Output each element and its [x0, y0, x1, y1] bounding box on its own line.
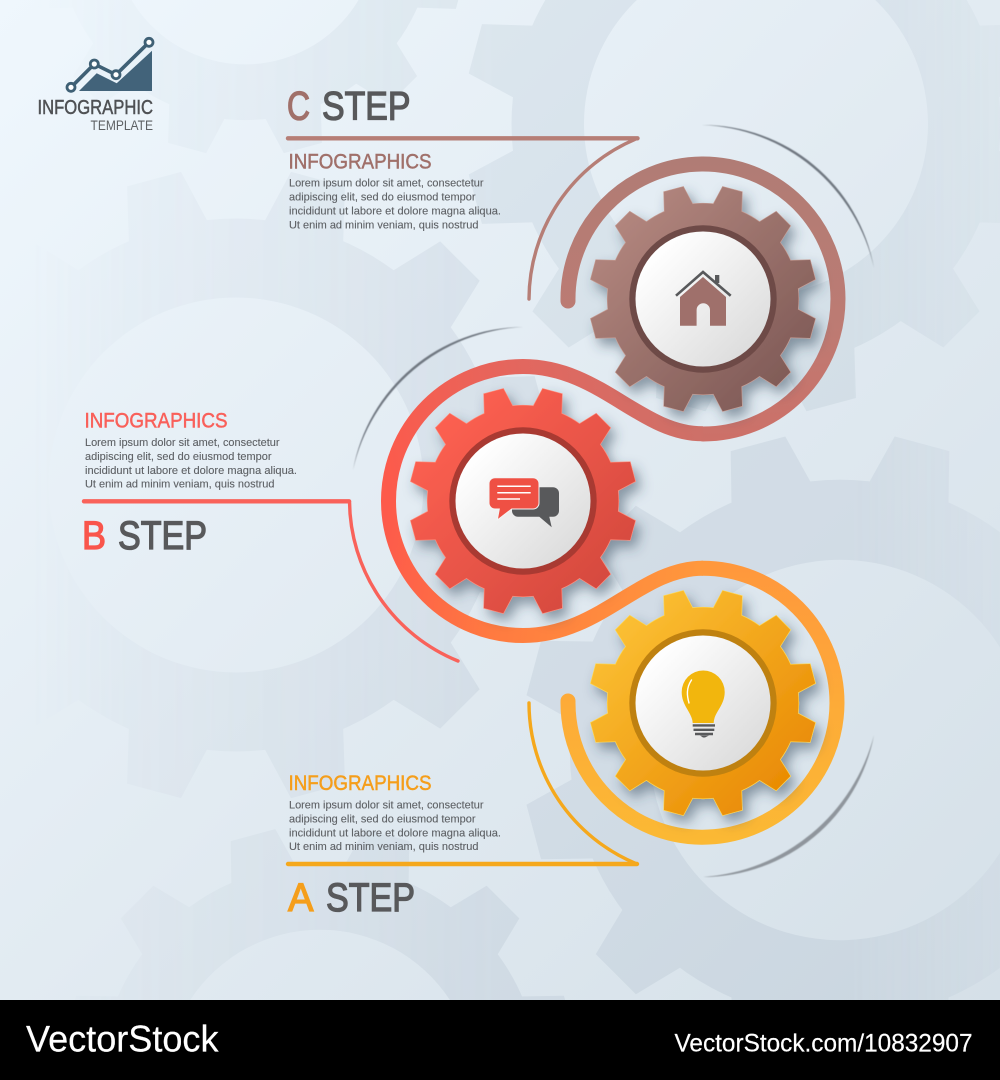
- heading word: STEP: STEP: [118, 514, 207, 558]
- gear C: [583, 179, 823, 419]
- body text: Lorem ipsum dolor sit amet, consectetur: [289, 799, 484, 811]
- body text: [289, 178, 501, 231]
- body text: Lorem ipsum dolor sit amet, consectetur: [289, 178, 484, 190]
- heading letter: A: A: [288, 876, 314, 920]
- grey crescent: A gear: [703, 735, 874, 877]
- body text: [85, 437, 297, 490]
- body text: Ut enim ad minim veniam, quis nostrud: [289, 841, 478, 853]
- body text: incididunt ut labore et dolore magna aliqua.: [289, 206, 501, 218]
- icon: light bulb: [682, 670, 725, 738]
- body text: adipiscing elit, sed do eiusmod tempor: [289, 192, 476, 204]
- gear C body: [583, 179, 823, 419]
- gear C ring: [629, 225, 777, 373]
- body text: adipiscing elit, sed do eiusmod tempor: [289, 813, 476, 825]
- heading word: STEP: STEP: [322, 84, 410, 128]
- logo chart icon: [67, 38, 153, 91]
- body text: incididunt ut labore et dolore magna aliqua.: [289, 827, 501, 839]
- logo subtitle: TEMPLATE: [90, 118, 153, 133]
- gear B ring: [449, 427, 597, 575]
- gear B: [403, 381, 643, 621]
- footer band: [0, 1000, 1000, 1080]
- gear A body: [583, 583, 823, 823]
- subheading: INFOGRAPHICS: [84, 409, 228, 432]
- body text: adipiscing elit, sed do eiusmod tempor: [85, 451, 272, 463]
- body text: incididunt ut labore et dolore magna aliqua.: [85, 465, 297, 477]
- connector line: B step: [84, 501, 458, 661]
- connector line: A step: [288, 703, 637, 864]
- gear C disc: [636, 232, 770, 366]
- gear B disc: [456, 434, 590, 568]
- gear A: [583, 583, 823, 823]
- gear A ring: [629, 629, 777, 777]
- ribbon connecting the three gears: [388, 164, 838, 837]
- grey crescent: C gear: [702, 125, 874, 268]
- footer image id: VectorStock.com/10832907: [674, 1030, 972, 1058]
- text block: A step: [288, 772, 501, 920]
- icon: speech bubbles: [489, 478, 559, 527]
- background gears: [280, 0, 943, 1000]
- subheading: INFOGRAPHICS: [288, 150, 432, 173]
- heading word: STEP: STEP: [326, 876, 415, 920]
- text block: B step: [82, 409, 297, 558]
- icon: house: [676, 272, 731, 326]
- grey crescent: B gear: [353, 327, 523, 470]
- heading letter: B: B: [82, 514, 106, 558]
- subheading: INFOGRAPHICS: [288, 772, 432, 795]
- heading letter: C: C: [287, 84, 310, 128]
- body text: Ut enim ad minim veniam, quis nostrud: [289, 219, 478, 231]
- gear A disc: [636, 636, 770, 770]
- text block: C step: [287, 84, 501, 231]
- connector line: C step: [288, 138, 638, 299]
- logo title: INFOGRAPHIC: [38, 97, 153, 119]
- body text: Ut enim ad minim veniam, quis nostrud: [85, 478, 274, 490]
- gear B body: [403, 381, 643, 621]
- logo: infographic template: [38, 38, 153, 133]
- body text: Lorem ipsum dolor sit amet, consectetur: [85, 437, 280, 449]
- footer brand: VectorStock: [26, 1019, 219, 1060]
- body text: [289, 799, 501, 853]
